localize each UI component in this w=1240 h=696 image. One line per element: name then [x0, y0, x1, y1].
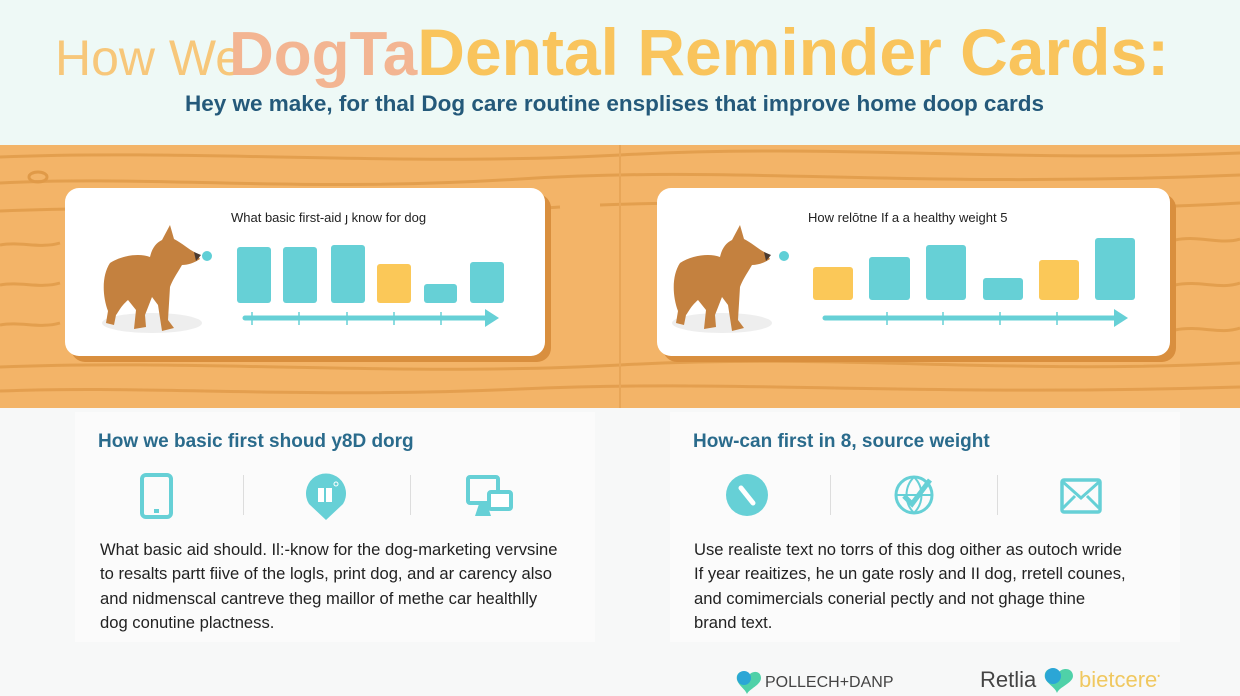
- icon: dog: [672, 225, 789, 333]
- header band: [0, 0, 1240, 145]
- logo: pollech: [736, 671, 894, 694]
- body text: brand text.: [694, 613, 772, 632]
- icon: devices: [466, 475, 513, 516]
- card title: How relōtne If a a healthy weight 5: [808, 210, 1007, 225]
- logo: pollech: POLLECH+DANP: [765, 674, 894, 691]
- subtitle: Hey we make, for thal Dog care routine ensplises that improve home doop cards: [185, 91, 1044, 116]
- panel: right info: [670, 412, 1180, 642]
- card title: What basic first-aid ȷ know for dog: [231, 210, 426, 225]
- heading: How we basic first shoud y8D dorg: [98, 431, 414, 452]
- body text: What basic aid should. Il:-know for the dog-marketing vervsine: [100, 540, 557, 559]
- body text: to resalts partt fiive of the logls, print dog, and ar carency also: [100, 564, 552, 583]
- body text: [100, 540, 557, 632]
- wood band: [0, 145, 1240, 408]
- icon: phone: [726, 474, 768, 516]
- logo: retlia bietcere: bietcere•: [1079, 667, 1160, 692]
- card: right chart: [657, 188, 1176, 362]
- title: How WeDogTaDental Reminder Cards:: [55, 15, 1169, 89]
- body text: dog conutine plactness.: [100, 613, 274, 632]
- body text: [694, 540, 1126, 632]
- body text: and nidmenscal cantreve theg maillor of methe car healthlly: [100, 589, 537, 608]
- icon: tablet: [140, 473, 173, 519]
- icon: location pin: [306, 474, 346, 520]
- bar chart: [813, 238, 1135, 327]
- body text: Use realiste text no torrs of this dog oither as outoch wride: [694, 540, 1122, 559]
- logo: retlia bietcere: [980, 667, 1160, 693]
- logo: retlia bietcere: Retlia: [980, 667, 1036, 692]
- panel: left info: [75, 412, 595, 642]
- icon: envelope: [1060, 478, 1102, 514]
- icon: globe check: [894, 476, 934, 514]
- bar chart: [237, 245, 504, 327]
- card: left chart: [65, 188, 551, 362]
- body text: and comimercials conerial pectly and not ghage thine: [694, 589, 1085, 608]
- icon: dog: [102, 225, 212, 333]
- body text: If year reaitizes, he un gate rosly and II dog, rretell counes,: [694, 564, 1126, 583]
- heading: How-can first in 8, source weight: [693, 431, 990, 452]
